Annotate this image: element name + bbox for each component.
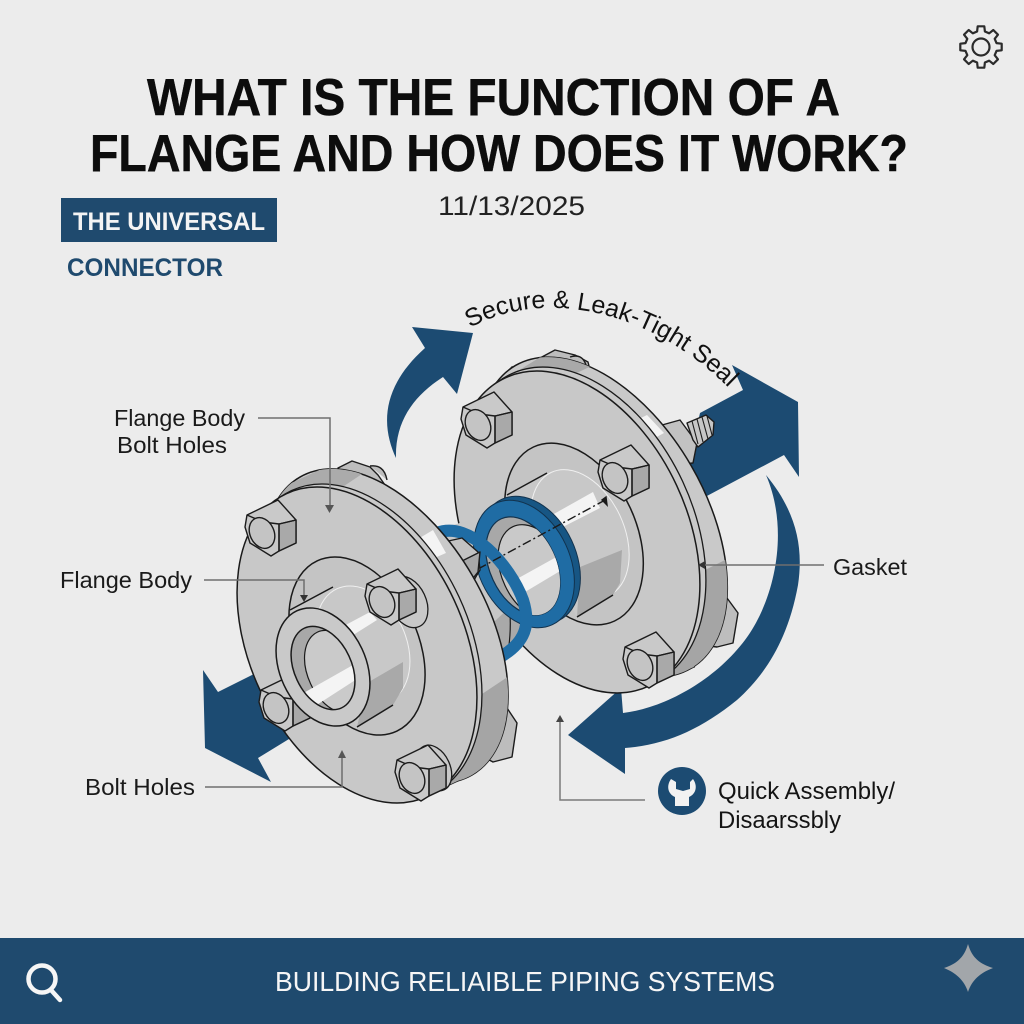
back nut: left flange top [338, 461, 387, 490]
gasket: left ring [437, 531, 526, 656]
back nut: right flange top [540, 350, 590, 380]
left flange front face [189, 448, 525, 842]
callout: Flange Body, middle [60, 567, 308, 602]
callout leader: assembly [556, 715, 645, 800]
back nut and thread: left flange middle [430, 538, 480, 590]
icon: wrench badge [658, 767, 706, 815]
subtitle badge [61, 198, 277, 242]
date: 11/13/2025 [438, 191, 585, 221]
bolt: left flange top left [244, 500, 296, 556]
icon: search [28, 966, 60, 1000]
bolt: right flange right [597, 445, 649, 501]
left flange rim [278, 468, 509, 786]
left hub [290, 571, 428, 727]
title: FLANGE AND HOW DOES IT WORK? [90, 125, 908, 183]
title: WHAT IS THE FUNCTION OF A [147, 69, 840, 127]
right hub [507, 454, 649, 617]
icon: sparkle [944, 944, 993, 992]
title [90, 69, 908, 183]
bolt: right flange bottom [622, 632, 674, 688]
bolt: left flange lower left, over flow arrow [258, 675, 310, 731]
right flange inner rim line [411, 327, 755, 729]
subtitle badge: THE UNIVERSAL [73, 208, 265, 236]
footer text: BUILDING RELIAIBLE PIPING SYSTEMS [275, 966, 775, 997]
icon: settings gear [960, 26, 1002, 68]
callout: Gasket [698, 554, 908, 580]
callout: Bolt Holes, lower: Bolt Holes [85, 774, 195, 800]
gasket: right ring [473, 496, 581, 628]
callout: Flange Body, middle: Flange Body [60, 567, 193, 593]
curved label: Secure & Leak-Tight Seal [465, 290, 740, 387]
footer banner [0, 938, 1024, 1024]
right flange raised boss [477, 421, 671, 647]
dashed axis line [478, 497, 607, 569]
right flange front face [405, 331, 749, 733]
subtitle second line: CONNECTOR [67, 254, 223, 282]
left flange inner rim line [194, 445, 530, 839]
arrow: right flow [680, 365, 799, 500]
callout: Gasket: Gasket [833, 554, 908, 580]
back nut and thread: right flange upper [662, 415, 714, 465]
arrow: curved upper left [387, 327, 473, 458]
callout: Flange Body and Bolt Holes, top [114, 405, 334, 513]
label: quick assembly: Quick Assembly/ [718, 778, 895, 805]
label: quick assembly [718, 778, 895, 834]
bolt: left flange right [364, 569, 436, 634]
left flange assembly [236, 460, 518, 804]
bolt: left flange bottom [394, 739, 459, 801]
connecting pipe [436, 520, 530, 670]
right flange rim [495, 356, 728, 676]
callout: Flange Body and Bolt Holes, top: Bolt Holes [117, 432, 227, 458]
left flange raised boss [262, 535, 452, 757]
callout: Flange Body and Bolt Holes, top: Flange Body [114, 405, 246, 431]
arrow: large curved rotation [568, 475, 800, 774]
label: quick assembly: Disaarssbly [718, 807, 841, 834]
left hub end ring [258, 593, 388, 741]
right flange assembly [453, 349, 739, 694]
callout: Bolt Holes, lower [85, 750, 346, 800]
back nut: right flange bottom [700, 598, 738, 647]
bolt: right flange top left [460, 392, 512, 448]
left hub bore [290, 626, 356, 710]
arrow: left flow [203, 660, 340, 782]
back nut: left flange bottom [480, 708, 517, 762]
